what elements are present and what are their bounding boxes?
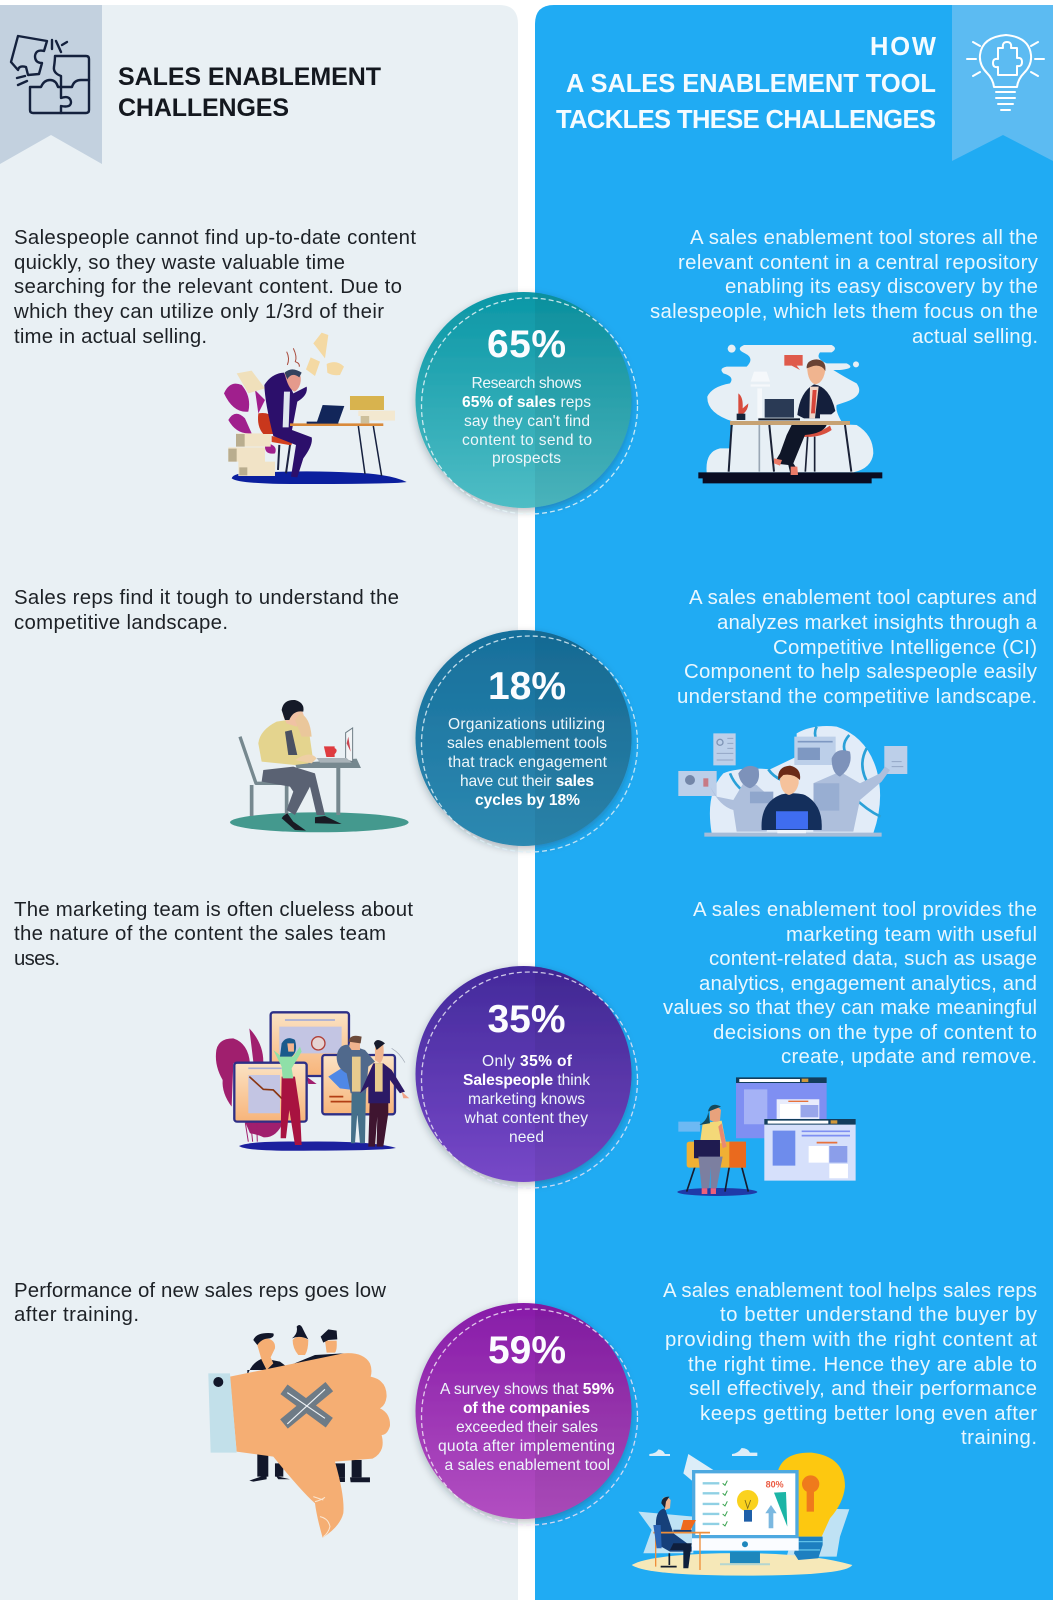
stat value: 65%: 65% [487,323,566,366]
icon: broken puzzle pieces [11,36,89,113]
stat value: 35%: 35% [488,998,566,1041]
stat text: 65% [462,375,592,467]
illustration: confused rep at laptop [230,700,409,832]
stat text: 65%: prospects [492,450,561,467]
text: challenge 1 [13,227,416,348]
text: solution 3 [663,899,1037,1068]
panel: solutions background [535,5,1053,1600]
text: solution 2: A sales enablement tool captures and [689,587,1037,609]
text: challenge 1: quickly, so they waste valuable time [14,252,345,274]
stat circle: 65% [416,292,638,514]
text: solution 1: actual selling. [912,326,1038,348]
illustration: thumbs down with team [208,1325,390,1538]
text: solution 1: enabling its easy discovery by the [725,276,1038,298]
text: solution 4: keeps getting better long even after [700,1403,1037,1425]
text: challenge 1: searching for the relevant content. Due to [14,276,402,298]
stat text: 35%: what content they [464,1110,588,1127]
heading: how a sales enablement tool tackles these challenges: TACKLES THESE CHALLENGES [556,106,936,134]
heading: sales enablement challenges [118,63,381,122]
stat circle: 18% [416,630,638,852]
stat text: 18% [447,716,608,809]
text: solution 1: A sales enablement tool stores all the [690,227,1038,249]
text: challenge 1: time in actual selling. [14,326,207,348]
stat text: 65%: content to send to [462,432,592,449]
heading: how a sales enablement tool tackles these challenges: HOW [870,33,937,61]
stat text: 59%: a sales enablement tool [444,1457,610,1474]
heading: how a sales enablement tool tackles these challenges [556,33,937,134]
text: solution 4: providing them with the right content at [665,1329,1037,1351]
icon: lightbulb with puzzle piece [967,35,1044,110]
heading: sales enablement challenges: SALES ENABLEMENT [118,63,381,91]
stat text: 35%: need [509,1129,544,1146]
stat text: 18%: cycles by 18% [475,792,580,809]
stat text: 18%: have cut their sales [460,773,594,790]
text: challenge 3: the nature of the content the sales team [14,923,386,945]
text: challenge 3: uses. [14,948,60,970]
stat text: 18%: Organizations utilizing [448,716,605,733]
illustration: woman with browser windows [677,1077,856,1196]
text: solution 2: understand the competitive landscape. [677,686,1037,708]
text: solution 3: A sales enablement tool provides the [693,899,1037,921]
text: challenge 1: which they can utilize only 1/3rd of their [13,301,384,323]
stat text: 65%: 65% of sales reps [462,394,591,411]
stat text: 18%: that track engagement [448,754,608,771]
stat text: 65%: say they can't find [464,413,590,430]
text: solution 2: analyzes market insights through a [717,612,1038,634]
text: solution 3: decisions on the type of content to [713,1022,1037,1044]
stat text: 59%: quota after implementing [438,1438,615,1455]
stat circle: 59% [416,1303,638,1525]
text: solution 4: training. [961,1427,1037,1449]
text: challenge 4: Performance of new sales reps goes low [14,1280,386,1302]
heading: how a sales enablement tool tackles these challenges: A SALES ENABLEMENT TOOL [566,70,936,98]
text: challenge 4: after training. [14,1304,139,1326]
text: challenge 2: competitive landscape. [14,612,228,634]
ribbon: challenges [0,5,102,164]
text: solution 4: sell effectively, and their performance [689,1378,1037,1400]
illustration: presentation screen with lightbulb: 80% [766,1479,784,1489]
stat text: 65%: Research shows [472,375,582,392]
illustration: confused team with charts [216,1012,409,1151]
text: challenge 2 [14,587,399,634]
text: solution 4: to better understand the buyer by [720,1304,1038,1326]
stat text: 35%: Only 35% of [482,1053,573,1070]
text: challenge 2: Sales reps find it tough to understand the [14,587,399,609]
text: solution 1: salespeople, which lets them focus on the [650,301,1038,323]
stat text: 59%: exceeded their sales [456,1419,598,1436]
text: challenge 3 [14,899,413,970]
text: challenge 1: Salespeople cannot find up-to-date content [14,227,416,249]
heading: sales enablement challenges: CHALLENGES [118,94,289,122]
stat text: 59%: of the companies [463,1400,590,1417]
text: solution 3: create, update and remove. [781,1046,1037,1068]
text: solution 3: marketing team with useful [786,924,1037,946]
text: solution 2: Competitive Intelligence (CI) [773,637,1037,659]
stat text: 59% [438,1381,615,1474]
stat circle: 35% [416,966,638,1188]
text: solution 4 [663,1280,1038,1449]
stat text: 59%: A survey shows that 59% [440,1381,614,1398]
panel: challenges background [0,5,518,1600]
text: challenge 3: The marketing team is often clueless about [14,899,413,921]
illustration: team with analytics panels [678,726,907,837]
stat text: 18%: sales enablement tools [447,735,607,752]
text: solution 3: content-related data, such as usage [709,948,1037,970]
stat value: 59%: 59% [488,1329,566,1372]
illustration: presentation screen with lightbulb [632,1448,852,1576]
stat value: 18%: 18% [488,665,566,708]
text: solution 4: A sales enablement tool helps sales reps [663,1280,1037,1302]
text: challenge 4 [14,1280,386,1326]
text: solution 4: the right time. Hence they are able to [688,1354,1037,1376]
ribbon: solutions [952,5,1053,161]
text: solution 2 [677,587,1038,708]
illustration: relaxed salesperson at desk [698,345,882,483]
text: solution 1 [650,227,1039,348]
text: solution 1: relevant content in a central repository [678,252,1039,274]
text: solution 3: values so that they can make meaningful [663,997,1037,1019]
stat text: 35%: Salespeople think [463,1072,590,1089]
stat text: 35%: marketing knows [468,1091,585,1108]
stat text: 35% [463,1053,590,1146]
text: solution 2: Component to help salespeople easily [684,661,1038,683]
text: solution 3: analytics, engagement analytics, and [699,973,1037,995]
illustration: stressed salesperson at desk [224,333,407,484]
